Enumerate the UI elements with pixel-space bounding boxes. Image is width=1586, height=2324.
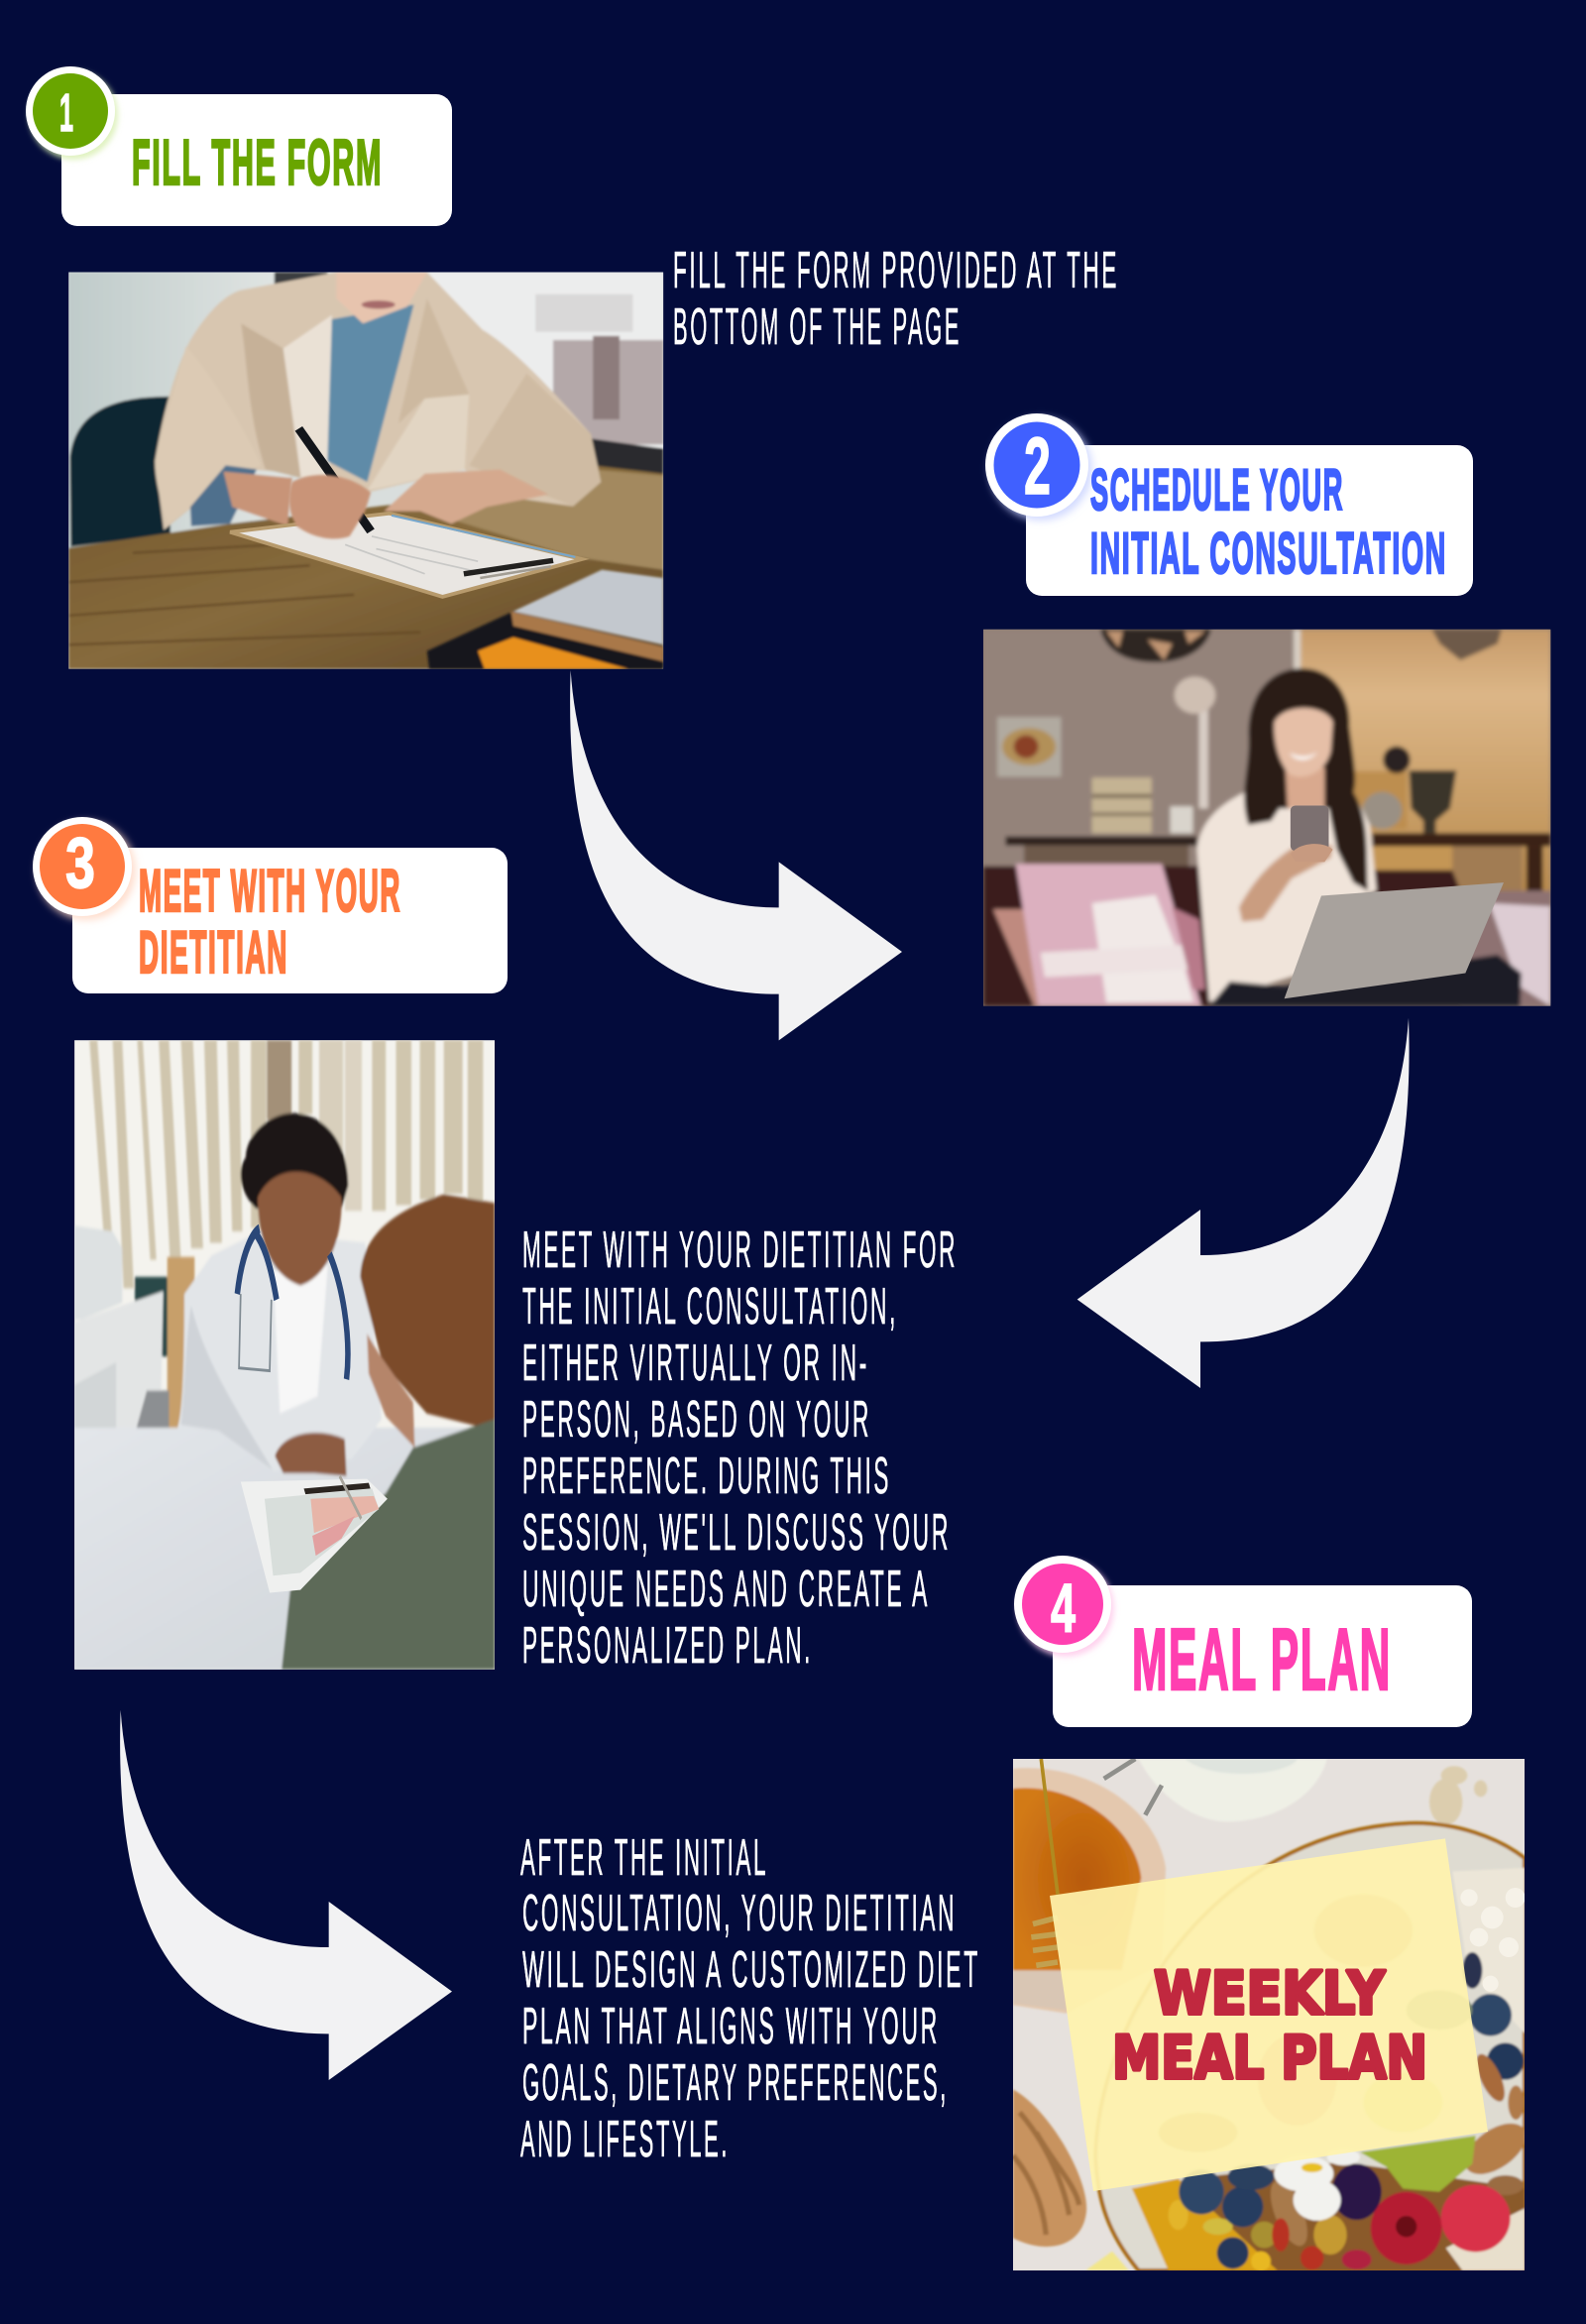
step 4 description: [520, 1829, 980, 2168]
text: UNIQUE NEEDS AND CREATE A: [522, 1561, 930, 1618]
step 2 number badge: [985, 413, 1088, 517]
step 2 heading: [1090, 458, 1447, 586]
step 3 heading: DIETITIAN: [139, 919, 288, 986]
arrow: step 3 to step 4: [120, 1710, 452, 2080]
text: GOALS, DIETARY PREFERENCES,: [522, 2054, 949, 2112]
step 3 number badge: 3: [65, 824, 95, 903]
step 3 card: [72, 848, 508, 993]
step 3 description: PERSON, BASED ON YOUR: [522, 1391, 871, 1449]
step 1 description: [673, 242, 1119, 356]
step 4 description: AND LIFESTYLE.: [520, 2111, 730, 2168]
step 2 card: [1026, 445, 1473, 596]
jar clasp: [1104, 1759, 1162, 1815]
step 3 number badge: [33, 817, 132, 916]
step 2 header: [985, 413, 1473, 596]
step 3 description: PREFERENCE. DURING THIS: [522, 1448, 891, 1505]
photo: woman filling in a form: [68, 272, 663, 669]
photo: dietitian with patient: [74, 1040, 495, 1670]
step 4 number badge: [1014, 1556, 1111, 1653]
step 1 number badge: 1: [59, 83, 73, 143]
step 1 card: [61, 94, 452, 226]
text: WILL DESIGN A CUSTOMIZED DIET: [522, 1941, 980, 1999]
text: PLAN THAT ALIGNS WITH YOUR: [522, 1998, 940, 2055]
weekly meal plan label: WEEKLY: [1154, 1959, 1386, 2029]
step 3 description: [522, 1221, 958, 1675]
arrow: step 1 to step 2: [570, 670, 902, 1040]
step 3 heading: [139, 858, 401, 986]
step 3 header: MEET WITH YOUR: [139, 858, 401, 924]
step 4 card: [1053, 1585, 1472, 1727]
photo: woman with phone and laptop: [983, 630, 1550, 1006]
photo: weekly meal plan bowl: [1013, 1759, 1534, 2271]
step 1 description: BOTTOM OF THE PAGE: [673, 298, 962, 356]
step 2 number badge: 2: [1024, 421, 1051, 512]
gold honey dipper: [1041, 1759, 1058, 1895]
step 4 number badge: 4: [1051, 1569, 1076, 1647]
step 1 header: FILL THE FORM: [132, 126, 383, 198]
weekly meal plan label: MEAL PLAN: [1112, 2024, 1427, 2093]
step 1 number badge: [26, 66, 115, 156]
step 3 header: [33, 817, 508, 993]
step 4 header: [1014, 1556, 1472, 1727]
weekly meal plan label: [1112, 1959, 1427, 2093]
step 1 header: [26, 66, 452, 226]
step 4 description: AFTER THE INITIAL: [520, 1829, 768, 1887]
writing hand: [289, 475, 371, 538]
translucent yellow note: [1050, 1838, 1488, 2191]
text: MEET WITH YOUR DIETITIAN FOR: [522, 1221, 958, 1279]
text: CONSULTATION, YOUR DIETITIAN: [522, 1885, 957, 1942]
arrow: step 2 to step 3: [1077, 1018, 1410, 1388]
step 3 description: PERSONALIZED PLAN.: [522, 1617, 813, 1675]
step 3 description: THE INITIAL CONSULTATION,: [522, 1278, 898, 1336]
text: SESSION, WE'LL DISCUSS YOUR: [522, 1504, 951, 1562]
step 3 description: EITHER VIRTUALLY OR IN-: [522, 1335, 869, 1392]
